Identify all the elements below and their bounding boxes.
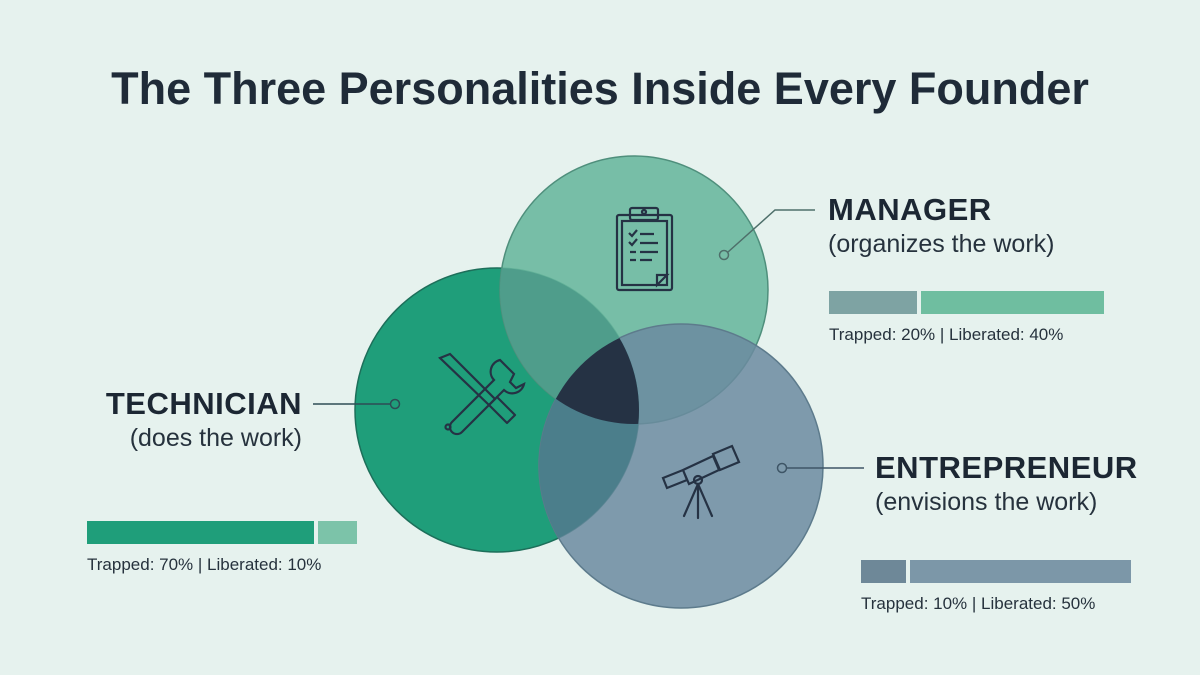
label: technician: (does the work) bbox=[130, 424, 302, 452]
bar: manager bbox=[829, 291, 1104, 314]
label: manager bbox=[828, 192, 1054, 258]
icon: clipboard bbox=[617, 208, 672, 290]
connector: technician bbox=[313, 400, 400, 408]
label: technician: TECHNICIAN bbox=[106, 386, 302, 421]
connector: entrepreneur bbox=[778, 464, 864, 472]
circle: manager bbox=[500, 156, 768, 424]
label: manager: (organizes the work) bbox=[828, 230, 1054, 258]
label: entrepreneur bbox=[875, 450, 1138, 516]
title: The Three Personalities Inside Every Founder bbox=[111, 63, 1089, 114]
label: manager: MANAGER bbox=[828, 192, 992, 227]
caption: entrepreneur: Trapped: 10% | Liberated: 50% bbox=[861, 594, 1095, 613]
label: technician bbox=[106, 386, 302, 452]
circle: technician bbox=[355, 268, 639, 552]
overlap: technician and entrepreneur bbox=[539, 399, 638, 538]
bar: technician bbox=[87, 521, 357, 544]
bar: entrepreneur bbox=[861, 560, 1131, 583]
circle: entrepreneur bbox=[539, 324, 823, 608]
venn diagram bbox=[313, 155, 864, 609]
overlap: technician and manager bbox=[500, 268, 620, 399]
icon: wrench and screwdriver bbox=[440, 354, 524, 434]
caption: technician: Trapped: 70% | Liberated: 10% bbox=[87, 555, 321, 574]
connector: manager bbox=[720, 210, 815, 260]
label: entrepreneur: (envisions the work) bbox=[875, 488, 1097, 516]
icon: telescope bbox=[663, 446, 739, 518]
caption: manager: Trapped: 20% | Liberated: 40% bbox=[829, 325, 1063, 344]
center intersection bbox=[556, 338, 639, 424]
label: entrepreneur: ENTREPRENEUR bbox=[875, 450, 1138, 485]
